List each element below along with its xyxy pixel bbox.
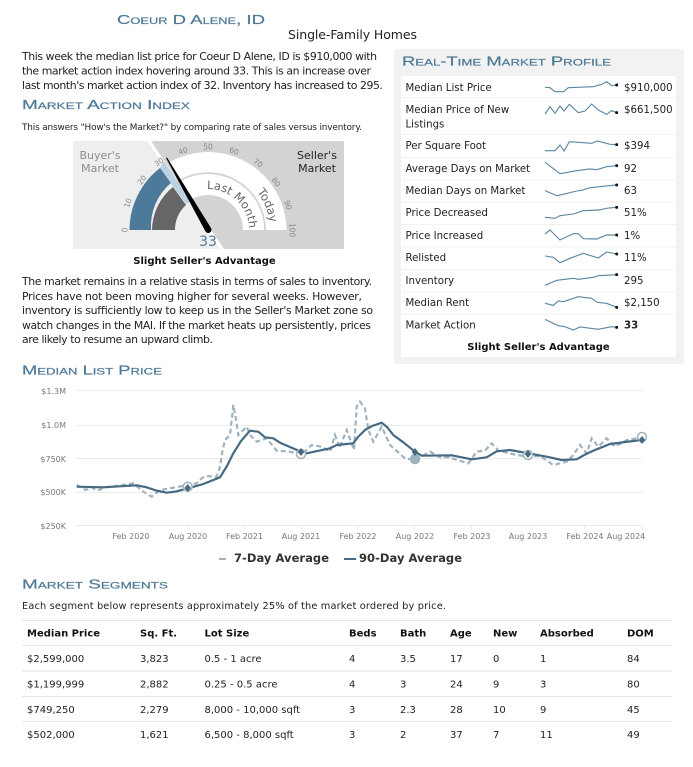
intro paragraph [21, 50, 383, 92]
gauge: scale numbers: 0 [120, 227, 130, 232]
chart legend [219, 551, 462, 565]
row values: 92 [624, 164, 637, 175]
y axis labels: $1.0M [41, 421, 66, 430]
gauge: scale numbers: 80 [270, 175, 283, 189]
table row 3: 10 [493, 705, 506, 716]
gauge: scale numbers: 70 [251, 157, 265, 170]
intro paragraph: the market action index hovering around 33. This is an increase over [22, 64, 372, 78]
table row 2: 4 [349, 680, 355, 690]
gauge: last month sector [152, 187, 186, 230]
heading: market action index: Market Action Index [22, 98, 190, 112]
row labels: Market Action [406, 320, 476, 332]
row labels: Median List Price [406, 83, 492, 94]
x axis labels: Feb 2022 [339, 532, 377, 541]
gauge: seller's market label: Seller's [297, 149, 337, 162]
market paragraph: watch changes in the MAI. If the market heats up persistently, prices [22, 319, 371, 332]
table header: DOM [627, 628, 654, 640]
table row 1: 0.5 - 1 acre [204, 654, 262, 665]
row labels: Median Rent [406, 298, 469, 309]
row values: $394 [624, 141, 650, 152]
panel heading: Real-Time Market Profile [402, 54, 611, 68]
table row 3: 9 [540, 705, 546, 716]
table header [27, 628, 654, 640]
intro paragraph: last month's market action index of 32. Inventory has increased to 295. [22, 79, 383, 92]
row labels: Listings [406, 120, 444, 130]
table row 3: 8,000 - 10,000 sqft [204, 705, 300, 716]
row values: 11% [624, 253, 647, 264]
intro paragraph: This week the median list price for Coeur D Alene, ID is $910,000 with [21, 50, 377, 63]
table row 3: 28 [450, 705, 463, 716]
90-day average line [77, 423, 642, 493]
table row 1: 17 [450, 654, 463, 665]
x axis labels: Feb 2021 [226, 532, 263, 541]
panel rows background [401, 76, 676, 357]
table row 2: 0.25 - 0.5 acre [204, 680, 277, 690]
gauge: scale numbers: 50 [203, 142, 213, 152]
market paragraph: The market remains in a relative stasis in terms of sales to inventory. [21, 275, 372, 288]
row labels: Median Price of New [406, 105, 509, 116]
row labels: Per Square Foot [406, 141, 486, 152]
description: market segments: Each segment below represents approximately 25% of the market ordered by price. [22, 601, 446, 612]
row values: $661,500 [624, 105, 673, 116]
gauge: white today and last month band [169, 152, 286, 230]
table header: Median Price [27, 628, 100, 640]
table header: Lot Size [204, 628, 249, 640]
gauge: light blue stripe [160, 161, 191, 204]
gauge: scale numbers: 30 [152, 155, 166, 168]
gauge [73, 141, 344, 250]
gauge: value: 33 [199, 234, 217, 250]
row labels: Average Days on Market [406, 164, 530, 175]
table row 3 [27, 705, 640, 716]
y axis labels: $250K [40, 522, 67, 531]
table row 3: 2,279 [140, 705, 169, 716]
table row 3: 2.3 [400, 705, 416, 716]
gauge: last month divider [176, 173, 265, 230]
y axis labels: $1.3M [41, 387, 66, 396]
table row 4: 7 [493, 730, 499, 741]
row values: 1% [624, 231, 640, 242]
heading: median list price: Median List Price [22, 364, 162, 378]
row labels: Median Days on Market [406, 186, 525, 197]
row values: 295 [624, 276, 643, 287]
x axis labels: Feb 2024 [566, 532, 604, 541]
table row 4: 6,500 - 8,000 sqft [204, 730, 294, 741]
table row 2: 2,882 [140, 680, 169, 690]
table row 2: 24 [450, 680, 463, 690]
row labels: Relisted [406, 253, 446, 264]
row values: 63 [624, 186, 637, 197]
title: Coeur D Alene, ID [117, 12, 265, 27]
table row 4: 2 [400, 730, 406, 741]
gauge: last month label: Last Month [208, 180, 258, 228]
table row 2 [27, 680, 640, 690]
chart markers: 90-day diamonds [184, 436, 645, 492]
panel: real-time market profile [394, 49, 684, 364]
x axis labels: Aug 2024 [607, 532, 645, 541]
gauge: buyer's market label: Buyer's [79, 149, 121, 162]
row values [624, 83, 673, 332]
gauge: seller's market label: Market [298, 162, 337, 175]
table row 3: 3 [349, 705, 355, 716]
table header: Absorbed [540, 628, 594, 640]
row labels [406, 83, 530, 332]
x axis labels: Aug 2020 [169, 532, 207, 541]
subtitle: Single-Family Homes [288, 27, 417, 42]
table row 2: 3 [400, 680, 406, 690]
line chart: median list price [40, 387, 646, 541]
y axis labels: $750K [40, 455, 67, 464]
x axis labels: Feb 2023 [453, 532, 491, 541]
table header: New [493, 628, 517, 640]
row labels: Price Increased [406, 231, 483, 242]
chart legend: 7-Day Average [234, 551, 329, 565]
gauge: today sector [130, 168, 172, 230]
table row 1: 0 [493, 654, 499, 665]
table row 2: 9 [493, 680, 499, 690]
gauge: scale numbers: 20 [136, 173, 149, 187]
x axis labels: Feb 2020 [112, 532, 150, 541]
sparklines upper [545, 82, 618, 196]
y axis labels [40, 387, 67, 531]
sparklines lower [545, 206, 618, 330]
x axis labels: Aug 2022 [396, 532, 434, 541]
table header: Age [450, 628, 472, 640]
table row 4: 37 [450, 730, 463, 741]
row values: 33 [624, 320, 638, 332]
gauge: scale numbers: 10 [122, 197, 134, 209]
gauge: scale numbers: 90 [282, 199, 294, 211]
gauge: buyer's market label [79, 149, 121, 175]
market paragraph: inventory is sufficiently low to keep us in the Seller's Market zone so [22, 304, 373, 317]
gauge: buyer's market label: Market [81, 162, 120, 175]
table row 4: 1,621 [140, 730, 169, 741]
gauge caption: Slight Seller's Advantage [133, 256, 276, 267]
row labels: Price Decreased [406, 208, 488, 219]
table row 4 [27, 730, 640, 741]
gauge: needle [166, 158, 212, 233]
table: market segments [22, 620, 672, 741]
table header: Bath [400, 628, 426, 640]
table header: Sq. Ft. [140, 628, 177, 640]
7-day average line, left [77, 405, 340, 497]
x axis labels: Aug 2021 [282, 532, 320, 541]
table row 4: 3 [349, 730, 355, 741]
market paragraph [21, 275, 373, 346]
table row 4: 11 [540, 730, 553, 741]
row labels: Inventory [406, 276, 454, 287]
gauge: scale numbers [120, 142, 296, 237]
table row 3: $749,250 [27, 705, 75, 716]
table row 4: $502,000 [27, 730, 75, 741]
heading: market segments: Market Segments [22, 578, 168, 592]
table row 1: 1 [540, 654, 546, 665]
table row 1: $2,599,000 [27, 654, 84, 665]
gauge: seller's market label [297, 149, 337, 175]
panel caption: Slight Seller's Advantage [467, 342, 610, 353]
table row 1: 3,823 [140, 654, 169, 665]
gauge: scale numbers: 100 [288, 223, 296, 237]
table row 2: 3 [540, 680, 546, 690]
table row 2: 80 [627, 680, 640, 690]
y axis labels: $500K [40, 488, 67, 497]
table row 4: 49 [627, 730, 640, 741]
table row 3: 45 [627, 705, 640, 716]
chart legend: 90-Day Average [359, 551, 462, 565]
chart markers: 7-day circles [183, 432, 646, 491]
market paragraph: Prices have not been moving higher for several weeks. However, [22, 290, 362, 303]
x axis labels [112, 532, 645, 541]
table row 1: 4 [349, 654, 355, 665]
row values: 51% [624, 208, 647, 219]
x axis labels: Aug 2023 [509, 532, 547, 541]
table row 1 [27, 654, 640, 665]
market paragraph: are likely to resume an upward climb. [22, 333, 213, 346]
gauge: today label: Today [258, 187, 276, 221]
table row 1: 3.5 [400, 654, 416, 665]
table row 1: 84 [627, 654, 640, 665]
row values: $2,150 [624, 298, 660, 309]
row values: $910,000 [624, 83, 673, 94]
description: market action index: This answers "How's the Market?" by comparing rate of sales versus inventory. [21, 123, 362, 133]
gauge: scale numbers: 60 [228, 145, 240, 157]
7-day average line, right [340, 402, 642, 465]
table row 2: $1,199,999 [27, 680, 84, 690]
gauge: scale numbers: 40 [177, 145, 189, 157]
table header: Beds [349, 628, 377, 640]
